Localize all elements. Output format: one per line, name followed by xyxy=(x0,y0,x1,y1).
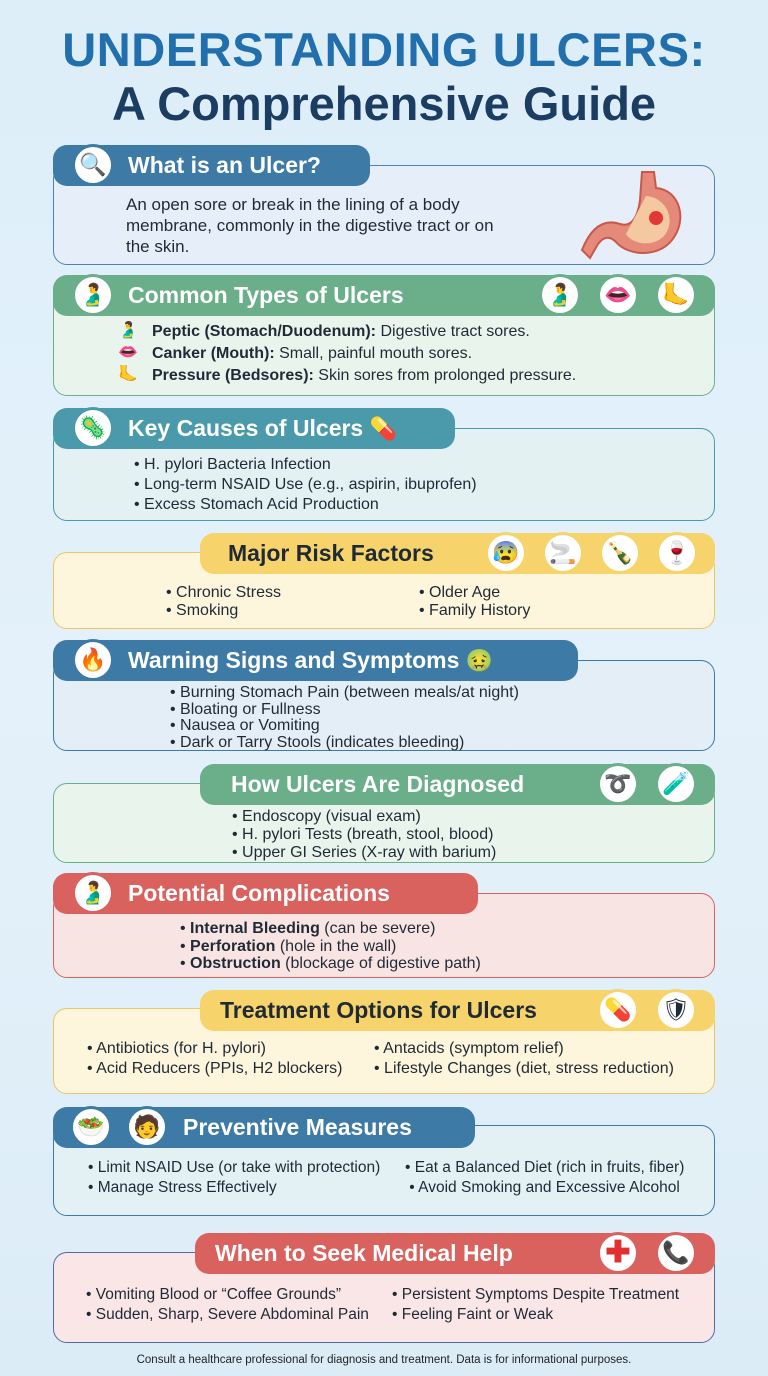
causes list xyxy=(134,456,477,513)
panel: warning signs xyxy=(53,660,715,751)
header: treatment xyxy=(200,990,715,1031)
header: seek help: When to Seek Medical Help xyxy=(215,1240,513,1266)
icons: types: 🫃 xyxy=(546,282,574,307)
icon: bacteria: 🦠 xyxy=(79,415,107,440)
diagnosis list: • Upper GI Series (X-ray with barium) xyxy=(232,844,496,861)
panel: common types: Canker (Mouth): Small, painful mouth sores. xyxy=(152,345,472,362)
header: key causes xyxy=(53,408,455,449)
panel: common types: Pressure (Bedsores): Skin sores from prolonged pressure. xyxy=(152,367,576,384)
icons: diagnosis: 🧪 xyxy=(662,771,690,796)
panel: common types xyxy=(53,280,715,396)
diagnosis list: • Endoscopy (visual exam) xyxy=(232,808,421,825)
icons: types xyxy=(542,274,694,313)
header: complications xyxy=(53,873,478,914)
help list: • Vomiting Blood or “Coffee Grounds” xyxy=(86,1286,341,1303)
panel: common types: 🫃 xyxy=(118,322,138,339)
panel: common types: 🦶 xyxy=(118,366,138,383)
icons: help: ✚ xyxy=(605,1236,631,1269)
header: common types xyxy=(53,275,715,316)
symptoms list: • Bloating or Fullness xyxy=(170,700,321,718)
panel: common types: 👄 xyxy=(118,344,138,361)
panel: common types: Peptic (Stomach/Duodenum): Digestive tract sores. xyxy=(152,323,530,340)
icon: stomach xyxy=(580,171,682,260)
icons: risk: 🍷 xyxy=(663,540,691,565)
risk list: • Smoking xyxy=(166,602,238,619)
panel: seek medical help: • Feeling Faint or Weak xyxy=(392,1306,553,1323)
risk list xyxy=(166,584,281,619)
prevention list xyxy=(88,1159,380,1196)
diagnosis list xyxy=(232,808,496,861)
icons: diagnosis xyxy=(600,763,694,802)
header: preventive xyxy=(53,1107,475,1148)
causes list: • Long-term NSAID Use (e.g., aspirin, ibuprofen) xyxy=(134,476,477,493)
icons: types: 🦶 xyxy=(662,282,690,307)
symptoms list: • Nausea or Vomiting xyxy=(170,717,320,734)
definition text: An open sore or break in the lining of a body membrane, commonly in the digestive tract or on the skin. xyxy=(126,195,494,256)
icons: risk: 🍾 xyxy=(606,540,634,565)
header: key causes: Key Causes of Ulcers 💊 xyxy=(128,415,397,441)
panel: risk factors: • Family History xyxy=(419,602,530,619)
header: warning signs: Warning Signs and Symptoms 🤢 xyxy=(128,647,493,673)
complications list xyxy=(180,920,481,972)
panel: key causes xyxy=(53,428,715,521)
icon: burning stomach xyxy=(72,639,114,681)
panel: complications xyxy=(53,893,715,978)
header: common types: Common Types of Ulcers xyxy=(128,282,404,308)
icon: stomach fire xyxy=(72,872,114,914)
panel: preventive xyxy=(53,1125,715,1216)
panel: risk factors xyxy=(53,552,715,629)
panel: treatment: • Antacids (symptom relief) xyxy=(374,1040,564,1057)
help list xyxy=(86,1286,369,1323)
icons: risk xyxy=(488,532,695,571)
icons: prevention: 🧑 xyxy=(133,1114,161,1139)
panel: treatment: • Lifestyle Changes (diet, stress reduction) xyxy=(374,1060,674,1077)
icons: help xyxy=(600,1232,694,1271)
causes list: • H. pylori Bacteria Infection xyxy=(134,456,331,473)
diagnosis list: • H. pylori Tests (breath, stool, blood) xyxy=(232,826,493,843)
icon: magnifier: 🔍 xyxy=(79,152,107,177)
title: UNDERSTANDING ULCERS: xyxy=(62,23,706,76)
icons: help: 📞 xyxy=(662,1240,690,1265)
panel: treatment xyxy=(53,1008,715,1094)
icons: treatment xyxy=(600,989,694,1028)
treatment list: • Acid Reducers (PPIs, H2 blockers) xyxy=(87,1060,342,1077)
header: diagnosed xyxy=(200,764,715,805)
icons: diagnosis: ➰ xyxy=(604,771,632,796)
panel: what is an ulcer xyxy=(53,165,715,265)
icon: stomach xyxy=(72,274,114,316)
header: seek help xyxy=(195,1233,715,1274)
complications list: • Internal Bleeding (can be severe) xyxy=(180,920,435,937)
header: warning signs xyxy=(53,640,578,681)
complications list: • Perforation (hole in the wall) xyxy=(180,938,396,954)
treatment list xyxy=(87,1040,342,1077)
symptoms list: • Burning Stomach Pain (between meals/at night) xyxy=(170,684,519,701)
header: risk factors: Major Risk Factors xyxy=(228,540,434,566)
header: complications: Potential Complications xyxy=(128,880,390,906)
risk list: • Chronic Stress xyxy=(166,584,281,601)
icons: prevention xyxy=(73,1106,165,1145)
causes list: • Excess Stomach Acid Production xyxy=(134,496,379,513)
symptoms list: • Dark or Tarry Stools (indicates bleeding) xyxy=(170,734,464,750)
icons: treatment: 💊 xyxy=(604,997,632,1022)
icons: prevention: 🥗 xyxy=(77,1114,105,1139)
header: risk factors xyxy=(200,533,715,574)
header: what is an ulcer xyxy=(53,145,370,186)
icon: bacteria xyxy=(72,407,114,449)
icons: risk: 😰 xyxy=(492,540,520,565)
complications list: • Obstruction (blockage of digestive path) xyxy=(180,955,481,972)
symptoms list xyxy=(170,684,519,750)
header: what is an ulcer: What is an Ulcer? xyxy=(128,152,321,178)
prevention list: • Manage Stress Effectively xyxy=(88,1179,277,1196)
panel: seek medical help xyxy=(53,1252,715,1343)
icon: stomach fire: 🫃 xyxy=(79,880,107,905)
header: preventive: Preventive Measures xyxy=(183,1114,412,1140)
icons: treatment: 🛡 xyxy=(662,997,690,1022)
icon: burning stomach: 🔥 xyxy=(79,647,107,672)
icon: magnifier xyxy=(72,144,114,186)
help list: • Sudden, Sharp, Severe Abdominal Pain xyxy=(86,1306,369,1323)
header: treatment: Treatment Options for Ulcers xyxy=(220,997,537,1023)
title xyxy=(62,23,706,130)
icons: types: 👄 xyxy=(604,282,632,307)
treatment list: • Antibiotics (for H. pylori) xyxy=(87,1040,266,1057)
icon: stomach: 🫃 xyxy=(79,282,107,307)
title: A Comprehensive Guide xyxy=(112,77,656,130)
panel: preventive: • Eat a Balanced Diet (rich in fruits, fiber) xyxy=(405,1159,684,1176)
panel: preventive: • Avoid Smoking and Excessive Alcohol xyxy=(409,1179,680,1196)
panel: seek medical help: • Persistent Symptoms Despite Treatment xyxy=(392,1286,679,1303)
icons: risk: 🚬 xyxy=(549,540,577,565)
panel: risk factors: • Older Age xyxy=(419,584,500,601)
type list xyxy=(118,321,576,384)
footer: Consult a healthcare professional for diagnosis and treatment. Data is for informational purposes. xyxy=(137,1354,631,1366)
header: diagnosed: How Ulcers Are Diagnosed xyxy=(231,771,524,797)
prevention list: • Limit NSAID Use (or take with protection) xyxy=(88,1159,380,1176)
panel: diagnosed xyxy=(53,783,715,863)
